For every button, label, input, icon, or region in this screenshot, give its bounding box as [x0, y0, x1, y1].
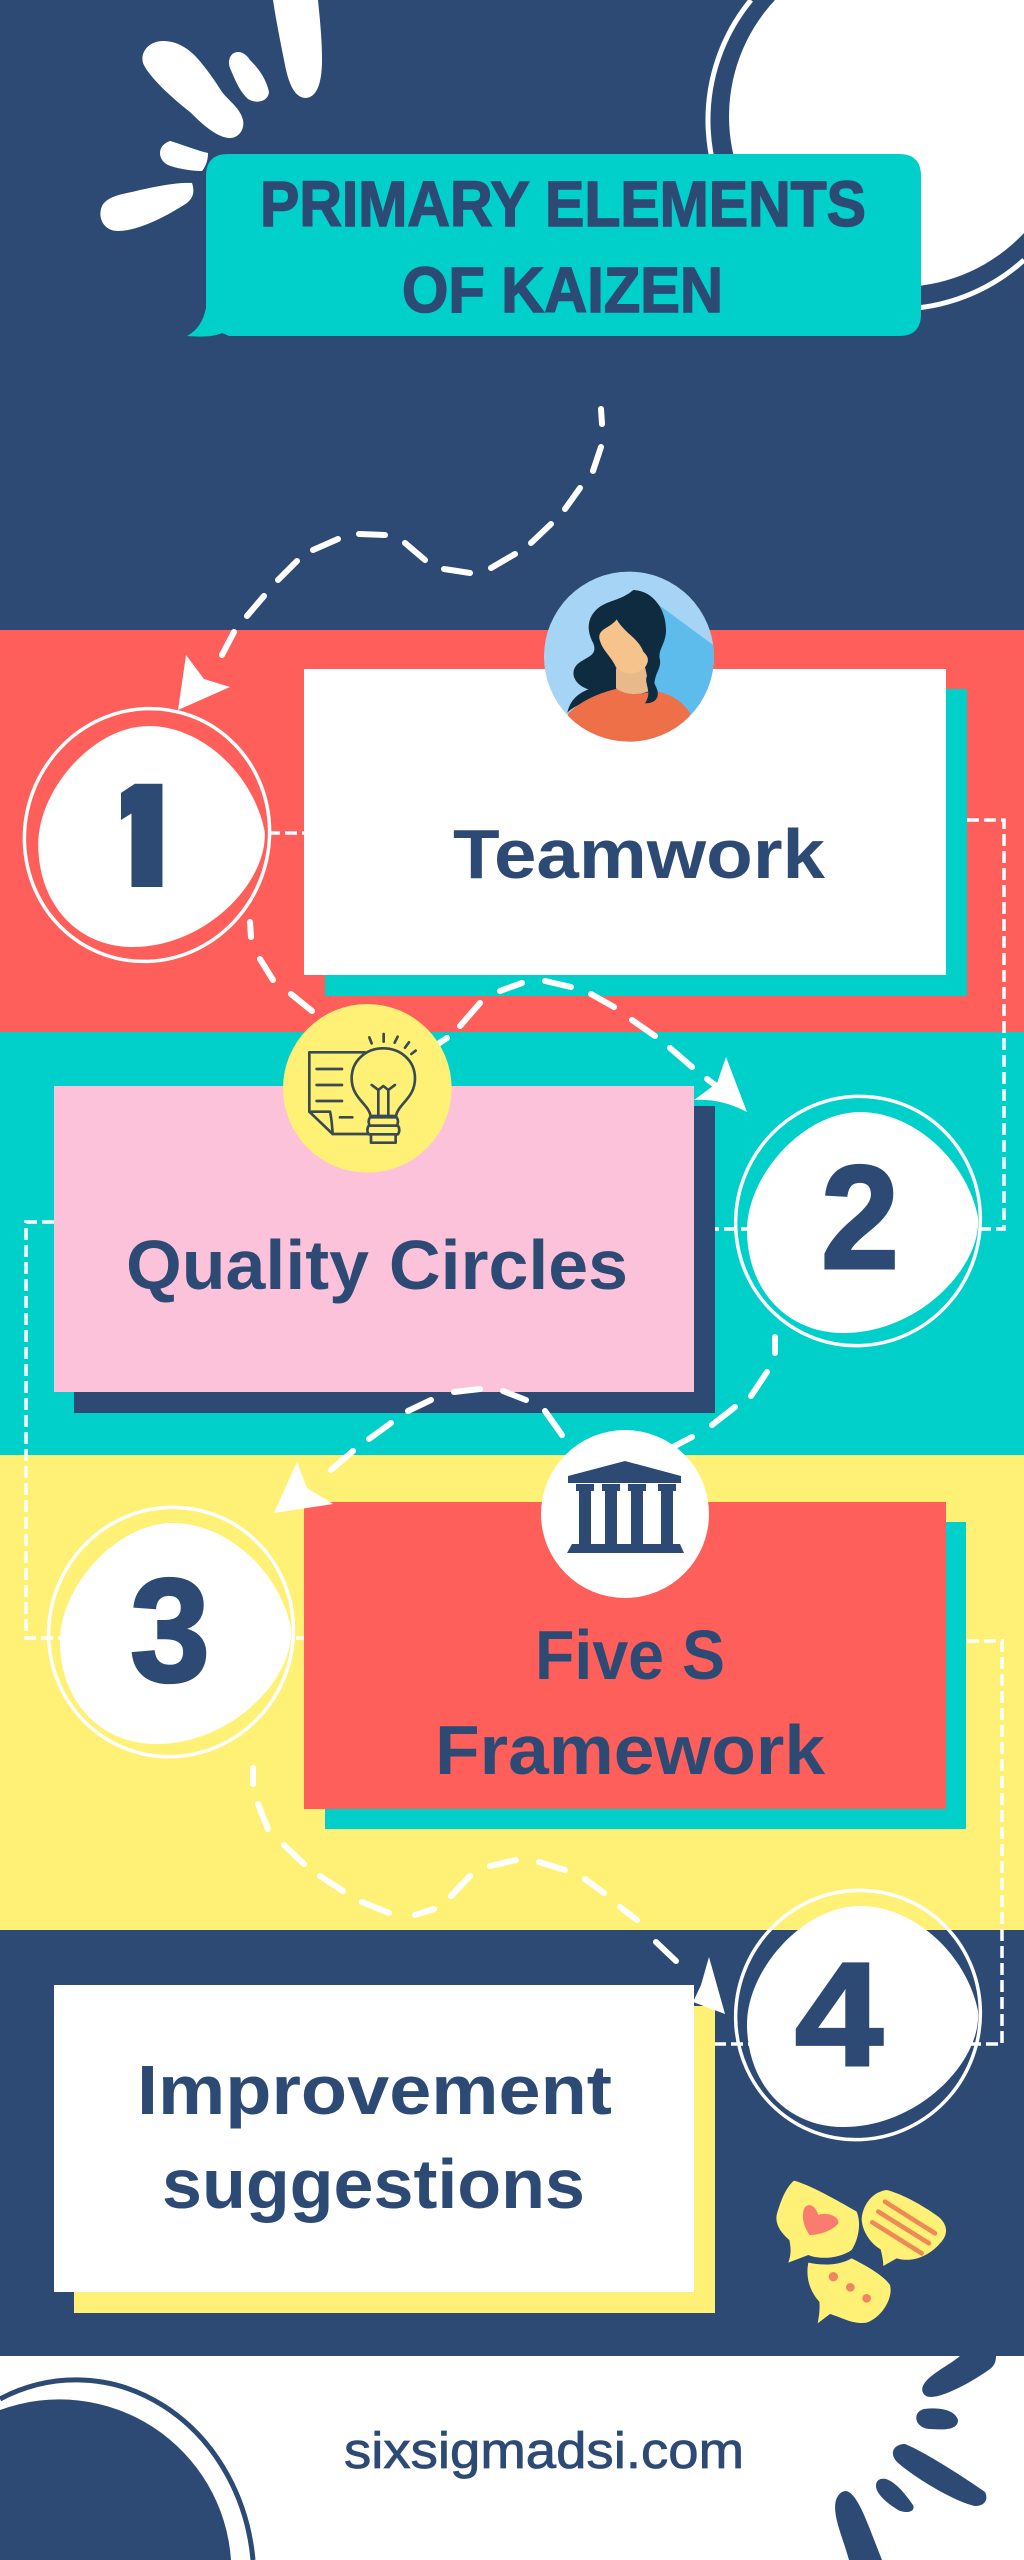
label: five s framework: Framework [435, 1711, 825, 1789]
icon: woman avatar [544, 572, 720, 747]
background band: yellow [0, 1455, 1024, 1930]
icon: speech bubbles [776, 2181, 946, 2323]
background band: teal [0, 1032, 1024, 1455]
title text: PRIMARY ELEMENTS [260, 168, 866, 240]
number 4: 4 [795, 1933, 883, 2097]
panel: teamwork card [304, 669, 967, 996]
arrow path: step 2 to step 3 [274, 1337, 775, 1513]
number 2: 2 [821, 1136, 899, 1300]
icon: lightbulb and note [283, 1004, 452, 1173]
label: improvement suggestions: Improvement [137, 2051, 612, 2129]
background band: navy lower [0, 1930, 1024, 2356]
number 3: 3 [130, 1549, 210, 1713]
step 4 badge [701, 1856, 1015, 2174]
title speech bubble [187, 154, 921, 337]
panel: quality circles card [54, 1086, 715, 1413]
step 2 badge [701, 1062, 1015, 1380]
panel: five s framework card [304, 1502, 966, 1829]
title text: OF KAIZEN [402, 254, 723, 326]
background band: navy header [0, 0, 1024, 630]
arrow path: start to step 1 [178, 409, 602, 710]
label: quality circles: Quality Circles [126, 1226, 628, 1304]
label: five s framework: Five S [535, 1616, 725, 1694]
title text [260, 168, 866, 326]
decoration: bottom right burst [835, 2356, 996, 2560]
connector: thin dashed lines [26, 820, 1004, 2044]
step 1 badge [22, 706, 272, 964]
background band: white footer [0, 2356, 1024, 2560]
decoration: bottom left circle [0, 2380, 253, 2560]
label: improvement suggestions: suggestions [162, 2145, 585, 2223]
label: improvement suggestions [137, 2051, 612, 2223]
step 3 badge [14, 1473, 328, 1791]
label: teamwork: Teamwork [453, 815, 825, 893]
arrow path: step 1 to step 2 [250, 922, 747, 1112]
label: five s framework [435, 1616, 825, 1789]
footer website: sixsigmadsi.com [344, 2422, 744, 2479]
icon: classical building [541, 1430, 709, 1598]
number 1: 1 [92, 747, 193, 951]
decoration: top right circle [708, 0, 1024, 309]
arrow path: step 3 to step 4 [253, 1768, 725, 2014]
background band: coral [0, 630, 1024, 1032]
decoration: top left burst [100, 0, 322, 231]
panel: improvement suggestions card [54, 1985, 715, 2313]
